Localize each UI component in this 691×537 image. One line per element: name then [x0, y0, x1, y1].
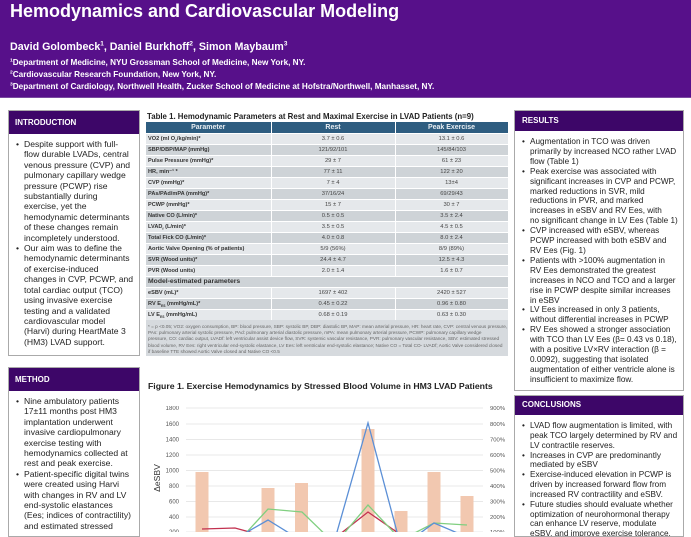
introduction text: hemodynamic determinants: [24, 212, 130, 222]
table 1: hemodynamic parameters: 122 ± 20: [440, 168, 463, 174]
right axis labels: 300%: [490, 500, 506, 506]
introduction text: Despite support with full-: [24, 139, 118, 149]
table footnote: blood volume, RV Ees: right ventricular end-systolic elastance, LV Ees: left ventricular end-systolic elastance; Native CO = Total CO- LVADf; Aortic Valve considered closed: [148, 343, 502, 348]
chart: exercise hemodynamics: [152, 406, 506, 532]
table 1: hemodynamic parameters: CVP (mmHg)*: [148, 180, 184, 186]
table footnote: PAs: pulmonary arterial systolic pressure, PAd: pulmonary arterial diastolic pressure, mPA: mean pulmonary arterial pressure, PCWP: pulmonary capillary wedge: [148, 330, 481, 335]
results text: increases in eSBV and RV Ees, with: [530, 206, 662, 215]
table 1: hemodynamic parameters: 24.4 ± 4.7: [320, 256, 346, 262]
table 1: hemodynamic parameters: LV EES (mmHg/mL): [148, 312, 197, 319]
right axis labels: [490, 406, 506, 536]
results text: Patients with >100% augmentation in: [530, 256, 665, 265]
introduction text: incompletely understood.: [24, 233, 120, 243]
results text: marked reductions in SVR, mild: [530, 187, 645, 196]
table 1: hemodynamic parameters: 4.0 ± 0.8: [322, 234, 344, 240]
authors: David Golombeck1, Daniel Burkhoff2, Simon Maybaum3: [10, 40, 287, 53]
conclusions text: optimization of neurohormonal therapy: [530, 510, 670, 519]
results text: RV Ees showed a stronger association: [530, 325, 670, 334]
table 1: hemodynamic parameters: Parameter: [191, 124, 225, 131]
conclusions heading: CONCLUSIONS: [522, 400, 581, 409]
table 1: hemodynamic parameters: Model-estimated parameters: [148, 278, 240, 284]
method heading: [9, 368, 139, 391]
y axis title: ΔeSBV: [152, 464, 162, 492]
table 1: hemodynamic parameters: 8.0 ± 2.4: [440, 234, 463, 240]
conclusions text: peak TCO largely determined by RV and: [530, 431, 677, 440]
table 1: hemodynamic parameters: PCWP (mmHg)*: [148, 202, 190, 208]
results text: with TCO than LV Ees (β= 0.43 vs 0.18),: [530, 335, 677, 344]
table 1: hemodynamic parameters: 0.5 ± 0.5: [322, 212, 344, 218]
results text: Peak exercise was associated with: [530, 167, 657, 176]
table 1: hemodynamic parameters: 0.68 ± 0.19: [319, 312, 347, 318]
introduction heading: [9, 111, 139, 134]
results text: 0.0092), suggesting that isolated: [530, 355, 648, 364]
results text: with a positive LV×RV interaction (β =: [530, 345, 666, 354]
conclusions text: Future studies should evaluate whether: [530, 500, 673, 509]
figure title: Figure 1. Exercise Hemodynamics by Stressed Blood Volume in HM3 LVAD Patients: [148, 381, 493, 391]
results text: [522, 137, 678, 384]
table title: Table 1. Hemodynamic Parameters at Rest and Maximal Exercise in LVAD Patients (n=9): [147, 112, 474, 121]
results text: Augmentation in TCO was driven: [530, 137, 650, 146]
results text: RV Ees (Fig. 1): [530, 246, 586, 255]
table 1: hemodynamic parameters: 121/92/101: [318, 146, 348, 152]
results text: RV Ees demonstrated the greatest: [530, 266, 655, 275]
conclusions text: Exercise-induced elevation in PCWP is: [530, 470, 671, 479]
table 1: hemodynamic parameters: Native CO (L/min)*: [148, 212, 197, 218]
line: blue series: [235, 423, 467, 537]
table 1: hemodynamic parameters: SBP/DBP/MAP (mmHg): [148, 146, 209, 152]
affiliation 3: 3Department of Cardiology, Northwell Health, Zucker School of Medicine at Hofstra/Northwell, Manhasset, NY.: [10, 82, 434, 91]
title: Hemodynamics and Cardiovascular Modeling: [10, 1, 399, 21]
method text: and estimated stressed: [24, 521, 113, 531]
conclusions text: increased RV contractility and eSBV.: [530, 490, 663, 499]
table 1: hemodynamic parameters: 29 ± 7: [325, 158, 341, 164]
conclusions text: [522, 421, 677, 537]
introduction text: total cardiac output (TCO): [24, 285, 123, 295]
method text: invasive cardiopulmonary: [24, 427, 121, 437]
conclusions text: LV contractile reserves.: [530, 441, 615, 450]
results text: PCWP increased with both eSBV and: [530, 236, 666, 245]
table 1: hemodynamic parameters: 77 ± 11: [324, 168, 342, 174]
introduction text: (HM3) LVAD support.: [24, 337, 105, 347]
method text: [16, 396, 131, 531]
method text: 17±11 months post HM3: [24, 406, 117, 416]
conclusions text: mediated by eSBV: [530, 460, 598, 469]
introduction text: of these changes remain: [24, 222, 118, 232]
introduction text: testing and a validated: [24, 306, 110, 316]
method text: hemodynamics collected at: [24, 448, 128, 458]
table 1: hemodynamic parameters: 0.63 ± 0.30: [437, 312, 466, 318]
method text: Patient-specific digital twins: [24, 469, 129, 479]
results text: LV Ees increased in only 3 patients,: [530, 305, 660, 314]
panel: conclusions: [514, 395, 684, 537]
table 1: hemodynamic parameters: 1697 ± 402: [318, 290, 347, 296]
table 1: hemodynamic parameters: PAs/PAd/mPA (mmHg)*: [148, 190, 209, 196]
left axis labels: 800: [169, 484, 180, 490]
table 1: hemodynamic parameters: HR, min⁻¹ *: [148, 168, 178, 174]
right axis labels: 500%: [490, 468, 506, 474]
introduction text: flow durable LVADs, central: [24, 149, 129, 159]
left axis labels: 600: [169, 500, 180, 506]
introduction text: changes in CVP, PCWP, and: [24, 274, 133, 284]
left axis labels: 1800: [166, 406, 180, 412]
method text: end-systolic elastances: [24, 500, 113, 510]
introduction text: pulmonary capillary wedge: [24, 170, 126, 180]
table footnote: pressure, CO: cardiac output, LVADf: left ventricular assist device flow, SVR: systemic vascular resistance, PVR: pulmonary vascular resistance, SBV: estimated stressed: [148, 336, 499, 341]
results text: no significant change in LV Ees (Table 1): [530, 216, 678, 225]
table 1: hemodynamic parameters: 37/16/24: [322, 190, 344, 196]
method text: Nine ambulatory patients: [24, 396, 119, 406]
table 1: hemodynamic parameters: eSBV (mL)*: [148, 290, 178, 296]
table 1: hemodynamic parameters: Aortic Valve Opening (% of patients): [148, 246, 244, 252]
table 1: hemodynamic parameters: Peak Exercise: [428, 124, 475, 131]
method heading: METHOD: [15, 375, 50, 384]
method text: rest and peak exercise.: [24, 458, 113, 468]
table 1: hemodynamic parameters: 0.45 ± 0.22: [319, 300, 347, 306]
conclusions text: Increases in CVP are predominantly: [530, 451, 661, 460]
results text: increases in NCO and TCO and a larger: [530, 276, 675, 285]
table 1: hemodynamic parameters: Pulse Pressure (mmHg)*: [148, 158, 213, 164]
results text: reductions in PVR, and marked: [530, 196, 643, 205]
left axis labels: 1200: [166, 453, 180, 459]
results heading: [515, 111, 683, 131]
left axis labels: [166, 406, 180, 536]
affiliation 1: 1Department of Medicine, NYU Grossman School of Medicine, New York, NY.: [10, 58, 305, 67]
affiliation 2: 2Cardiovascular Research Foundation, New York, NY.: [10, 70, 216, 79]
table 1: hemodynamic parameters: 8/9 (89%): [439, 246, 464, 252]
introduction text: exercise, yet the: [24, 201, 87, 211]
introduction text: venous pressure (CVP) and: [24, 160, 130, 170]
method text: were created using Harvi: [24, 479, 119, 489]
table 1: hemodynamic parameters: 3.7 ± 0.6: [322, 136, 344, 142]
table 1: hemodynamic parameters: Total Fick CO (L/min)*: [148, 234, 206, 240]
results text: rise in PCWP despite similar increases: [530, 286, 670, 295]
right axis labels: 200%: [490, 515, 506, 521]
table 1: hemodynamic parameters: 30 ± 7: [443, 202, 460, 208]
results text: CVP increased with eSBV, whereas: [530, 226, 659, 235]
results text: primarily by increased NCO rather LVAD: [530, 147, 676, 156]
left axis labels: 400: [169, 515, 180, 521]
results text: augmentation of either ventricle alone is: [530, 365, 675, 374]
introduction text: Our aim was to define the: [24, 243, 122, 253]
right axis labels: 600%: [490, 453, 506, 459]
table 1: hemodynamic parameters: 145/84/103: [437, 146, 466, 152]
right axis labels: 700%: [490, 438, 506, 444]
table 1: hemodynamic parameters: 2.0 ± 1.4: [322, 268, 344, 274]
conclusions heading: [515, 396, 683, 415]
bars: change in eSBV: [196, 429, 474, 532]
left axis labels: 1000: [166, 468, 180, 474]
table 1: hemodynamic parameters: RV EES (mmHg/mL)*: [148, 300, 200, 308]
table footnote: * = p <0.05; VO2: oxygen consumption, BP: blood pressure, SBP: systolic BP, DBP: diastolic BP, MAP: mean arterial pressure, HR: heart rate, CVP: central venous pressure,: [148, 324, 507, 329]
table 1: hemodynamic parameters: 5/9 (56%): [320, 246, 346, 252]
panel: introduction: [8, 110, 140, 356]
results text: insufficient to maximize flow.: [530, 375, 633, 384]
table 1: hemodynamic parameters: PVR (Wood units): [148, 268, 195, 274]
introduction text: hemodynamic determinants: [24, 253, 130, 263]
left axis labels: 1600: [166, 422, 180, 428]
table 1: hemodynamic parameters: SVR (Wood units)*: [148, 256, 197, 262]
right axis labels: 400%: [490, 484, 506, 490]
header banner: [0, 0, 691, 98]
panel: results: [514, 110, 684, 391]
table footnote: [146, 320, 508, 356]
table 1: hemodynamic parameters: 0.96 ± 0.80: [437, 300, 466, 306]
table 1: hemodynamic parameters: 7 ± 4: [327, 180, 339, 186]
method text: (Ees; indices of contractility): [24, 510, 131, 520]
method text: exercise testing with: [24, 438, 101, 448]
method text: with changes in RV and LV: [24, 490, 126, 500]
method text: implantation underwent: [24, 417, 113, 427]
introduction text: cardiovascular model: [24, 316, 105, 326]
introduction text: using invasive exercise: [24, 295, 112, 305]
introduction heading: INTRODUCTION: [15, 118, 76, 127]
table 1: hemodynamic parameters: [146, 122, 508, 356]
conclusions text: LVAD flow augmentation is limited, with: [530, 421, 672, 430]
table 1: hemodynamic parameters: 4.5 ± 0.5: [440, 224, 463, 230]
introduction text: substantially during: [24, 191, 98, 201]
results text: flow (Table 1): [530, 157, 579, 166]
table 1: hemodynamic parameters: 3.5 ± 2.4: [440, 212, 463, 218]
table 1: hemodynamic parameters: 3.5 ± 0.5: [322, 224, 344, 230]
introduction text: of exercise-induced: [24, 264, 99, 274]
conclusions text: can enhance LV reserve, modulate: [530, 519, 656, 528]
table 1: hemodynamic parameters: 2420 ± 527: [437, 290, 466, 296]
conclusions text: driven by increased forward flow from: [530, 480, 666, 489]
introduction text: pressure (PCWP) rise: [24, 181, 108, 191]
line: red series: [202, 512, 434, 537]
table 1: hemodynamic parameters: 69/29/43: [440, 190, 463, 196]
table 1: hemodynamic parameters: 13.1 ± 0.6: [439, 136, 464, 142]
table 1: hemodynamic parameters: LVADf (L/min)*: [148, 224, 186, 231]
right axis labels: 800%: [490, 422, 506, 428]
results text: without differential increases in PCWP: [530, 315, 669, 324]
introduction text: [16, 139, 133, 347]
table 1: hemodynamic parameters: VO2 (ml O2/kg/min)*: [148, 136, 201, 143]
panel: method: [8, 367, 140, 537]
table 1: hemodynamic parameters: 12.5 ± 4.3: [439, 256, 464, 262]
table footnote: if baseline TTE showed Aortic Valve closed and Native CO <0.5: [148, 349, 280, 354]
left axis labels: 1400: [166, 438, 180, 444]
results text: significant increases in CVP and PCWP,: [530, 177, 675, 186]
right axis labels: 900%: [490, 406, 506, 412]
table 1: hemodynamic parameters: 13±4: [445, 180, 458, 186]
table 1: hemodynamic parameters: 61 ± 23: [442, 158, 461, 164]
table 1: hemodynamic parameters: 15 ± 7: [325, 202, 341, 208]
table 1: hemodynamic parameters: 1.6 ± 0.7: [440, 268, 463, 274]
table 1: hemodynamic parameters: Rest: [325, 124, 341, 131]
results text: in eSBV: [530, 296, 560, 304]
introduction text: (Harvi) during HeartMate 3: [24, 326, 126, 336]
results heading: RESULTS: [522, 116, 559, 125]
line: green series: [235, 505, 467, 537]
